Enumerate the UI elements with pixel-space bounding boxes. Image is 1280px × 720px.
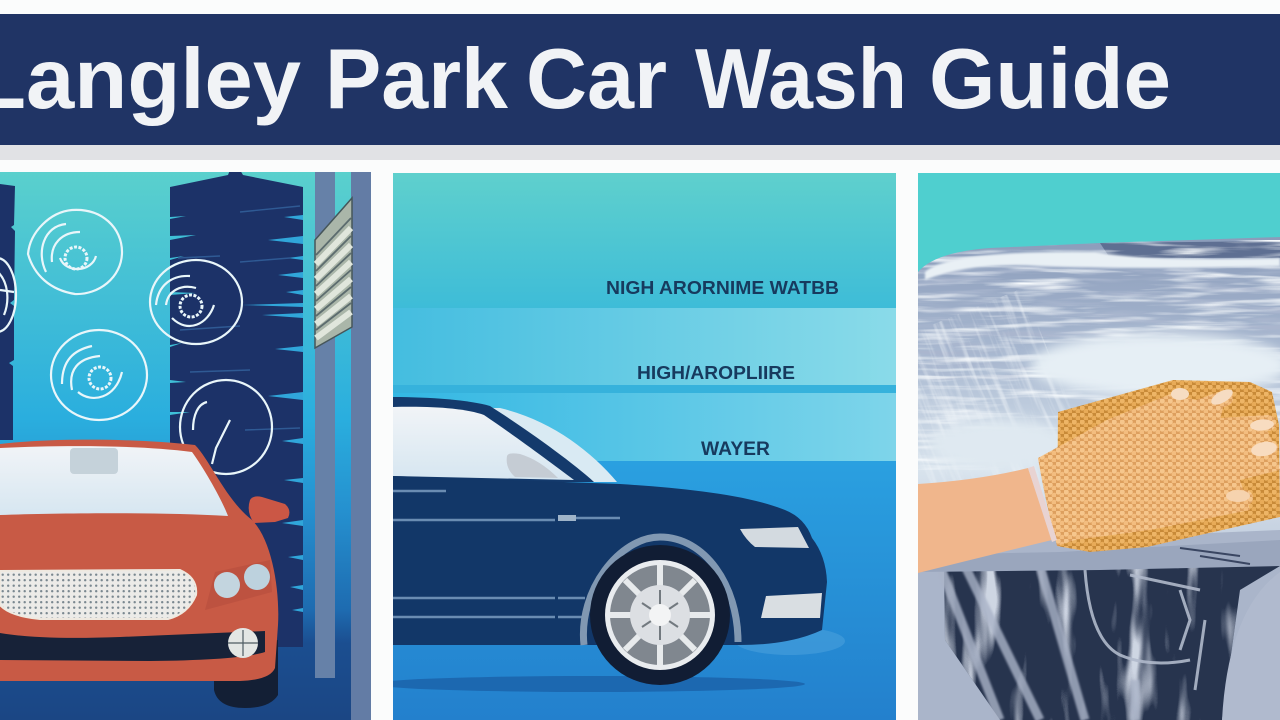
- wheel: [590, 545, 730, 685]
- mitt: back layer: [1057, 380, 1280, 552]
- bubbles: [0, 210, 272, 474]
- title: Park: [325, 32, 509, 127]
- window detail: [507, 453, 558, 478]
- body: [393, 476, 827, 645]
- side mirror: [249, 496, 289, 523]
- pole: right: [351, 172, 371, 720]
- door handle: [558, 515, 576, 521]
- rear tyre: [214, 640, 278, 708]
- brush: right: [170, 170, 303, 647]
- pole: middle: [315, 172, 335, 678]
- bumper intake: [0, 631, 265, 661]
- cuff: [1028, 466, 1057, 542]
- windshield: [0, 446, 228, 516]
- wheel arch: [583, 537, 738, 645]
- arm: [918, 468, 1052, 573]
- bubble 4: [180, 380, 272, 474]
- label: line 1: NIGH ARORNIME WATBB: [606, 278, 839, 298]
- bristle gaps, right edge: [242, 215, 303, 612]
- headlight: [740, 527, 809, 548]
- rear-view mirror: [70, 448, 118, 474]
- bristle gaps, left edge: [170, 216, 196, 415]
- ground shadow: [375, 676, 805, 692]
- red car: [0, 440, 289, 681]
- bubble 2: [150, 260, 242, 344]
- bubble 1: [28, 210, 122, 294]
- soft foam: [1030, 333, 1280, 397]
- fog light: [228, 628, 258, 658]
- side window: [393, 407, 574, 480]
- bubble 5: [0, 258, 16, 332]
- body highlights: [393, 491, 620, 617]
- title: [0, 32, 1171, 127]
- brush: left: [0, 184, 15, 440]
- finger tips: [1171, 388, 1189, 400]
- headlights: [214, 572, 240, 598]
- louvered sign: [315, 198, 352, 348]
- streak texture: [800, 240, 1280, 582]
- label: line 2: HIGH/AROPLIIRE: [637, 363, 795, 383]
- bristle strokes: [178, 206, 300, 430]
- fingers: [1170, 398, 1270, 498]
- title: Guide: [929, 32, 1171, 127]
- mitt: hand layer: [1038, 386, 1280, 546]
- bubble 3: [51, 330, 147, 420]
- title: Car: [526, 32, 667, 127]
- dark soaped panel: [918, 530, 1280, 720]
- grille: [0, 570, 196, 619]
- panel: hand wash with mitt: [800, 173, 1280, 720]
- foam band: [925, 252, 1280, 280]
- windscreen highlight: [490, 408, 617, 482]
- cabin: [393, 397, 594, 482]
- puddle: [738, 630, 845, 655]
- headlight shading: [205, 560, 272, 610]
- label: line 3: WAYER: [701, 439, 770, 460]
- panel: high pressure water: [375, 173, 896, 720]
- soapy car hood: [800, 237, 1280, 582]
- header banner: [0, 14, 1280, 160]
- title: Wash: [695, 32, 907, 127]
- panel: automatic brush wash: [0, 170, 371, 720]
- lower lamp: [761, 593, 822, 618]
- navy car: [393, 397, 827, 685]
